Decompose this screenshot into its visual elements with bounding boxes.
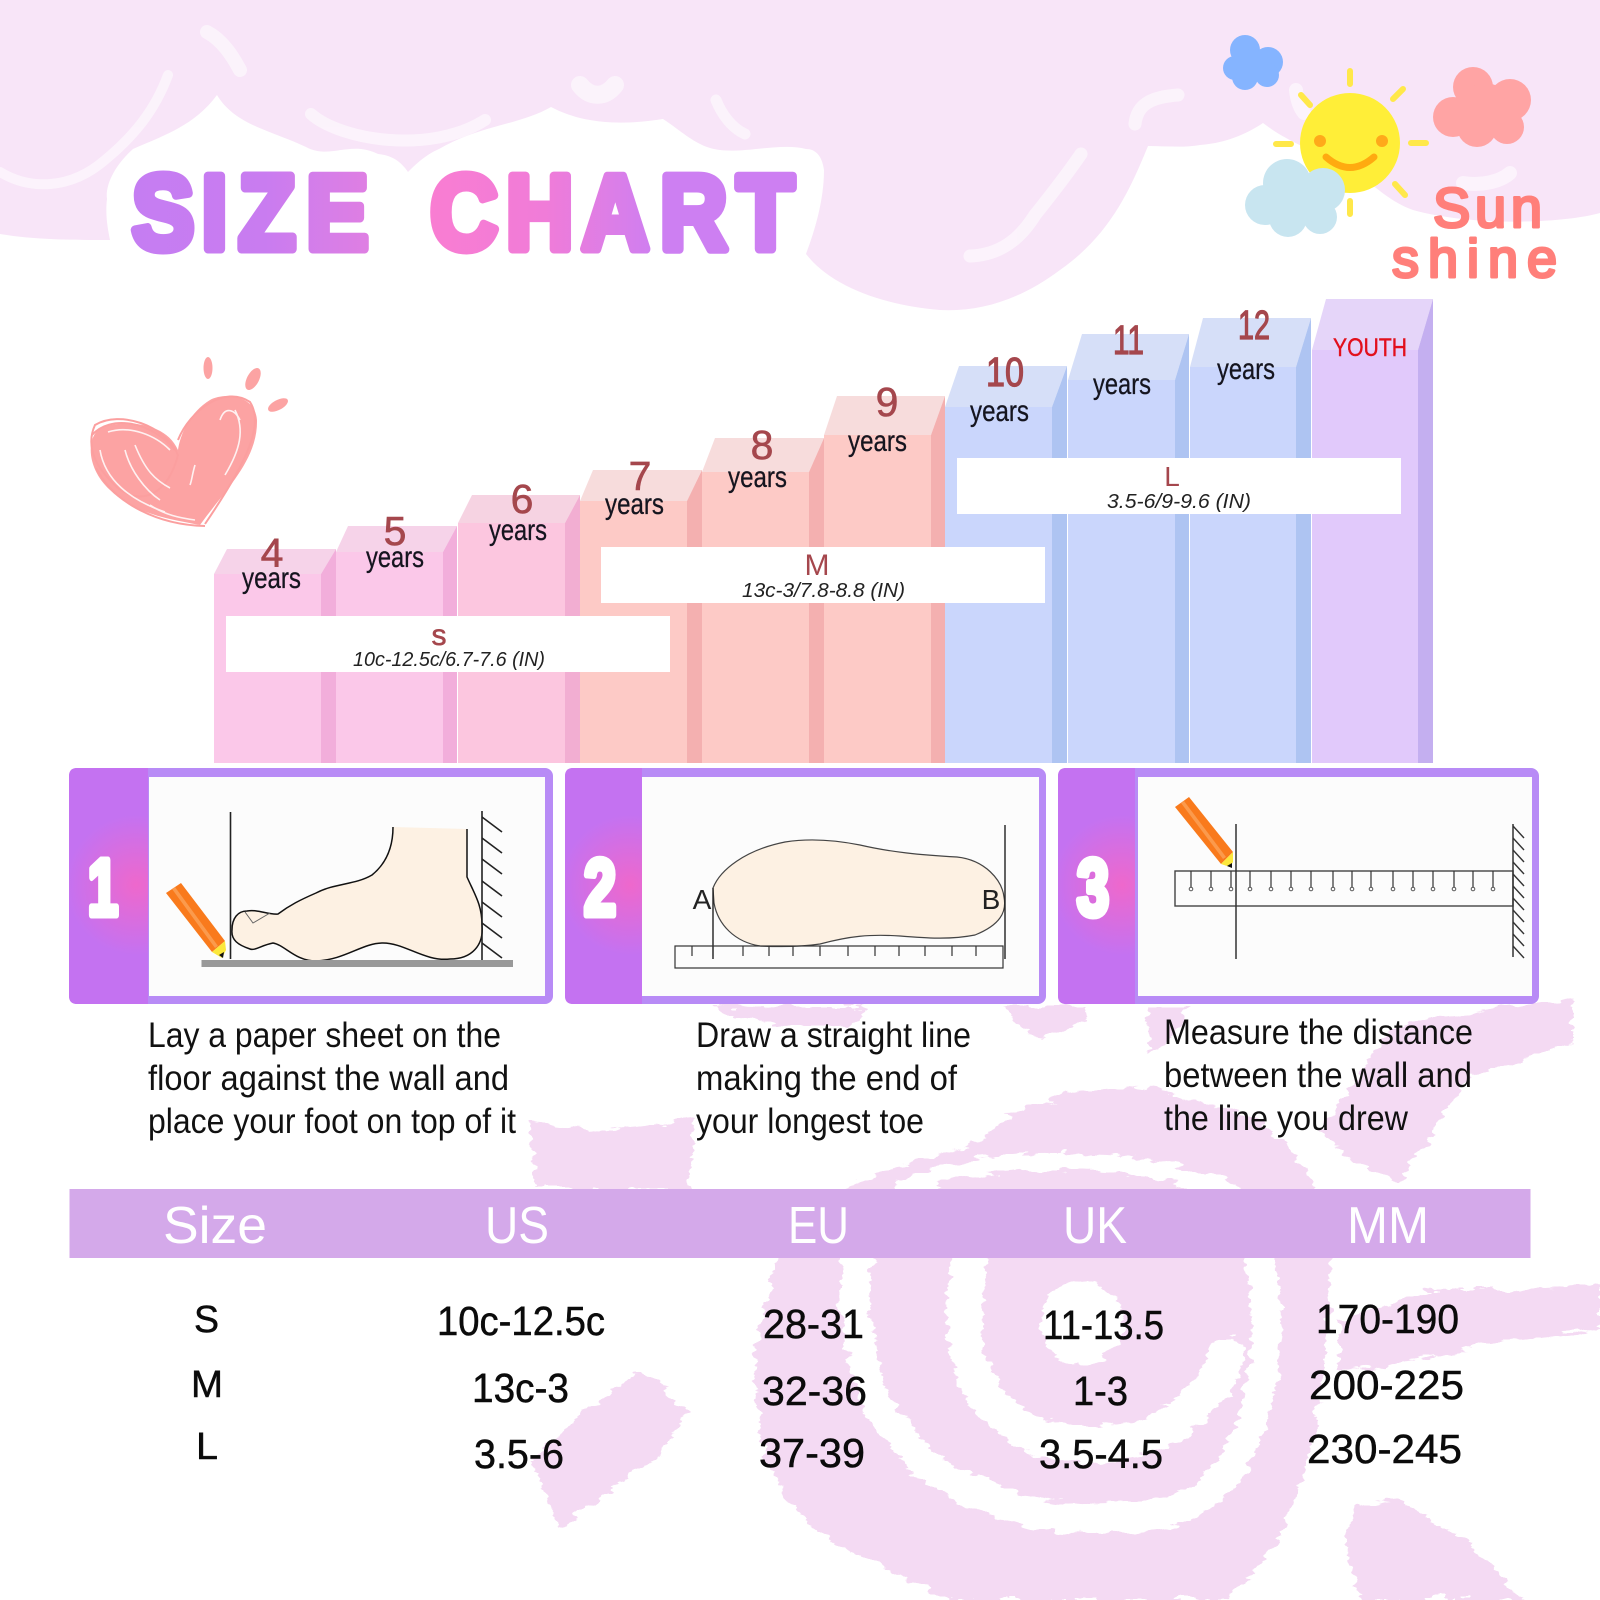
logo: Sun shine [1392, 176, 1557, 289]
title: SIZE CHART: SIZE [132, 155, 368, 272]
text: step 2 instructions [696, 1016, 971, 1141]
ruler diagram [1175, 824, 1524, 959]
column: EU: 37-39 [759, 1430, 865, 1476]
table header: Size [163, 1197, 267, 1255]
text: step 1 instructions: Lay a paper sheet on the [148, 1016, 501, 1055]
column: UK: 3.5-4.5 [1039, 1431, 1163, 1477]
step number 3: 3 [1077, 843, 1109, 932]
foot outline diagram [675, 825, 1005, 968]
age labels: 4 [261, 530, 283, 576]
table header: EU [788, 1197, 849, 1255]
icon: pencil [1175, 797, 1233, 868]
text: step 3 instructions: between the wall and [1164, 1056, 1472, 1095]
icon: pencil [166, 883, 226, 958]
background: brush swirl bottom [530, 1000, 1600, 1600]
column: MM: 200-225 [1309, 1362, 1464, 1408]
title: SIZE CHART: CHART [430, 155, 794, 272]
column: EU: 32-36 [762, 1368, 867, 1414]
size band: M [601, 547, 1045, 603]
age labels: years [242, 562, 301, 595]
age labels: YOUTH [1333, 334, 1407, 362]
size band: L: L [1164, 461, 1180, 492]
text: step 1 instructions [148, 1016, 516, 1141]
bar: 12 years [1190, 318, 1311, 763]
size band: L [957, 458, 1401, 514]
bar: 11 years [1068, 334, 1189, 763]
text: step 3 instructions: the line you drew [1164, 1099, 1409, 1138]
bar: 7 years [580, 470, 702, 763]
column: MM: 230-245 [1307, 1426, 1462, 1472]
text: step 3 instructions: Measure the distance [1164, 1013, 1473, 1052]
icon: blue cloud [1223, 35, 1283, 90]
panel: step 1 [69, 768, 553, 1004]
age labels: 12 [1238, 302, 1270, 348]
age labels: 11 [1113, 317, 1144, 363]
title: SIZE CHART: SIZE [132, 155, 368, 272]
text: step 2 instructions: Draw a straight line [696, 1016, 971, 1055]
title: SIZE CHART [132, 155, 794, 272]
size band: S [226, 616, 670, 672]
column: MM [1307, 1296, 1464, 1472]
age labels: years [605, 488, 664, 521]
size band: M: M [804, 549, 830, 582]
age labels: years [970, 395, 1029, 428]
icon: smiling sun [1276, 71, 1426, 214]
age labels: years [366, 541, 424, 574]
bar: 5 years [336, 526, 457, 763]
column: EU [759, 1301, 867, 1476]
age labels: years [728, 461, 787, 494]
icon: scribble heart [91, 357, 290, 526]
panel: step 2 [565, 768, 1046, 1004]
column: EU: 28-31 [763, 1301, 864, 1347]
size band: M: 13c-3/7.8-8.8 (IN) [742, 580, 905, 602]
text: step 3 instructions [1164, 1013, 1473, 1138]
column: US: 3.5-6 [474, 1431, 564, 1477]
age labels: 9 [876, 379, 898, 425]
table body: size values [191, 1296, 1464, 1477]
bar: 10 years [945, 366, 1067, 763]
table header: MM [1347, 1197, 1429, 1255]
icon: light blue cloud [1245, 159, 1345, 237]
column: UK [1039, 1302, 1164, 1477]
column: UK: 1-3 [1073, 1368, 1128, 1414]
age labels [242, 302, 1407, 595]
text: step 1 instructions: floor against the wall and [148, 1059, 509, 1098]
step number 1: 1 [88, 844, 118, 933]
title: SIZE CHART: CHART [430, 155, 794, 272]
age labels: 8 [751, 422, 773, 468]
age labels: 10 [986, 349, 1024, 395]
bar: 4 years [214, 549, 336, 763]
column: US [437, 1298, 605, 1477]
foot outline diagram: B [982, 884, 1000, 915]
chart: age bars [214, 299, 1433, 763]
age labels: 6 [511, 476, 533, 522]
bar: youth [1312, 299, 1433, 763]
column: US: 13c-3 [472, 1365, 569, 1411]
bar: 6 years [458, 495, 580, 763]
age labels: years [1093, 368, 1151, 401]
column: Size: L [196, 1426, 218, 1468]
age labels: 5 [384, 508, 406, 554]
step number 2: 2 [584, 843, 616, 932]
bar: 8 years [702, 438, 824, 763]
column: Size [191, 1299, 223, 1468]
age labels: years [848, 425, 907, 458]
table header [70, 1189, 1530, 1258]
panel: step 3 [1058, 768, 1539, 1004]
age labels: years [489, 514, 547, 547]
foot side view diagram [202, 811, 513, 967]
column: UK: 11-13.5 [1043, 1302, 1164, 1348]
background: pink cloud top [0, 0, 1600, 310]
size band: S: 10c-12.5c/6.7-7.6 (IN) [353, 649, 545, 671]
foot outline diagram: A [693, 884, 712, 915]
table header: UK [1063, 1197, 1127, 1255]
column: US: 10c-12.5c [437, 1298, 605, 1344]
age labels: years [1217, 353, 1275, 386]
text: step 2 instructions: making the end of [696, 1059, 957, 1098]
icon: pink cloud [1433, 67, 1531, 147]
table header: US [485, 1197, 549, 1255]
column: MM: 170-190 [1316, 1296, 1459, 1342]
logo: Sun shine: shine [1392, 229, 1557, 289]
size band: L: 3.5-6/9-9.6 (IN) [1107, 491, 1251, 513]
bar: 9 years [824, 396, 945, 763]
text: step 2 instructions: your longest toe [696, 1102, 924, 1141]
size band: S: s [432, 619, 446, 652]
column: Size: S [194, 1299, 219, 1341]
logo: Sun shine: Sun [1433, 176, 1542, 239]
age labels: 7 [629, 453, 651, 499]
text: step 1 instructions: place your foot on top of it [148, 1102, 516, 1141]
column: Size: M [191, 1364, 223, 1406]
